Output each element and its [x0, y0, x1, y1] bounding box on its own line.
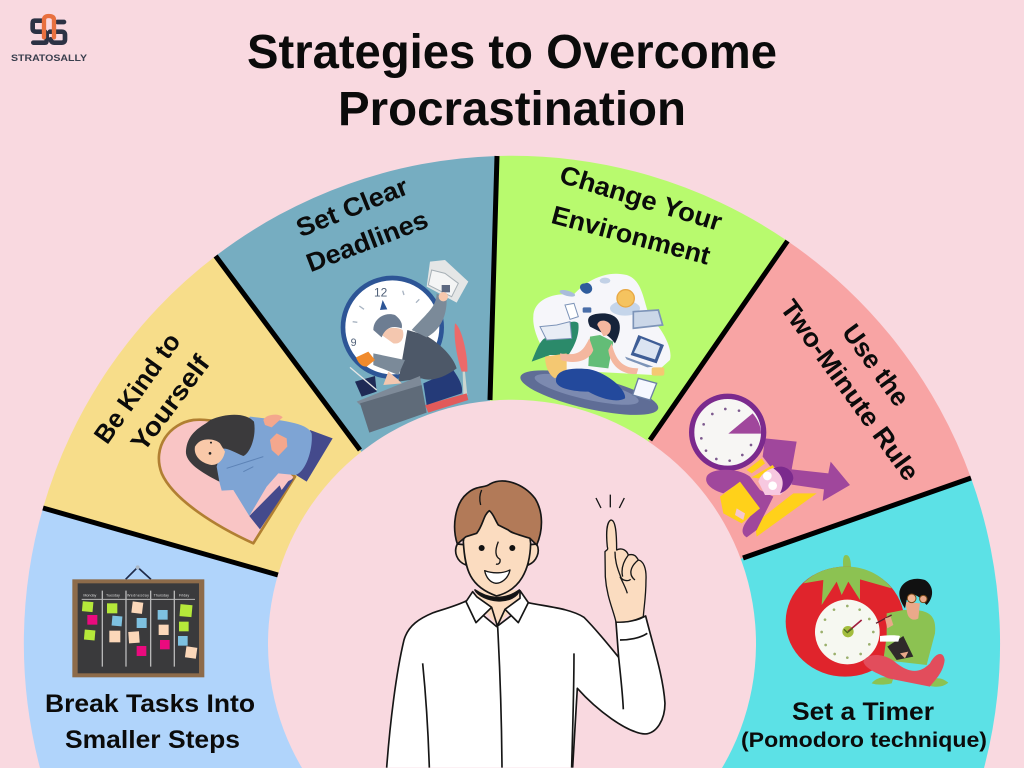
icon: kanban board: Tuesday [106, 593, 120, 597]
label: two-minute rule: Two-Minute Rule [774, 294, 926, 486]
segment: break tasks [45, 565, 255, 754]
label: break tasks [45, 690, 255, 754]
ears [456, 544, 538, 565]
label: environment [548, 159, 726, 271]
logo: StratoSally [11, 16, 87, 63]
icon: busy man with clock: 12 [374, 286, 388, 300]
icon: kanban board: Friday [179, 593, 189, 597]
eyes, nose and mouth [479, 542, 515, 583]
label: deadlines [292, 171, 432, 278]
label: deadlines: Set Clear [292, 171, 412, 243]
logo: StratoSally: STRATOSALLY [11, 53, 87, 63]
icon: kanban board [72, 565, 204, 677]
neck [476, 590, 520, 625]
label: deadlines: Deadlines [302, 204, 432, 278]
collar [423, 590, 647, 768]
icon: tomato timer and woman [786, 555, 948, 687]
segment: set a timer [741, 555, 987, 752]
segment: change your environment [517, 159, 726, 424]
label: break tasks: Break Tasks Into [45, 690, 255, 718]
label: set a timer: (Pomodoro technique) [741, 729, 987, 752]
segment: two-minute rule [692, 294, 926, 537]
icon: busy man with clock [343, 260, 468, 433]
fan diagram background segments [24, 156, 1000, 768]
label: environment: Environment [548, 199, 714, 271]
label: break tasks: Smaller Steps [65, 726, 240, 754]
icon: meditating woman [517, 274, 671, 424]
label: be kind: Be Kind to [88, 327, 186, 449]
segment: be kind to yourself [88, 327, 333, 543]
icon: woman hugging herself in heart [159, 415, 333, 543]
title: Strategies to Overcome [247, 26, 777, 79]
title: Procrastination [338, 83, 686, 136]
hair [455, 481, 541, 545]
icon: clock, arrow and person on laptop [692, 396, 850, 537]
label: set a timer: Set a Timer [792, 698, 934, 726]
label: be kind: Yourself [124, 349, 216, 457]
segment: set clear deadlines [292, 171, 468, 433]
face [463, 503, 531, 596]
pointing hand [605, 520, 646, 622]
title [247, 26, 777, 136]
icon: busy man with clock: 3 [426, 312, 432, 323]
label: set a timer [741, 698, 987, 752]
label: environment: Change Your [556, 159, 726, 237]
illustration: man pointing finger up [387, 481, 665, 768]
label: two-minute rule: Use the [836, 318, 916, 412]
icon: busy man with clock: 9 [351, 337, 357, 349]
icon: kanban board: Monday [83, 593, 97, 597]
shirt [387, 601, 665, 768]
icon: kanban board: Wednesday [127, 593, 149, 597]
spark lines [596, 495, 624, 508]
icon: kanban board: Thursday [154, 593, 169, 597]
